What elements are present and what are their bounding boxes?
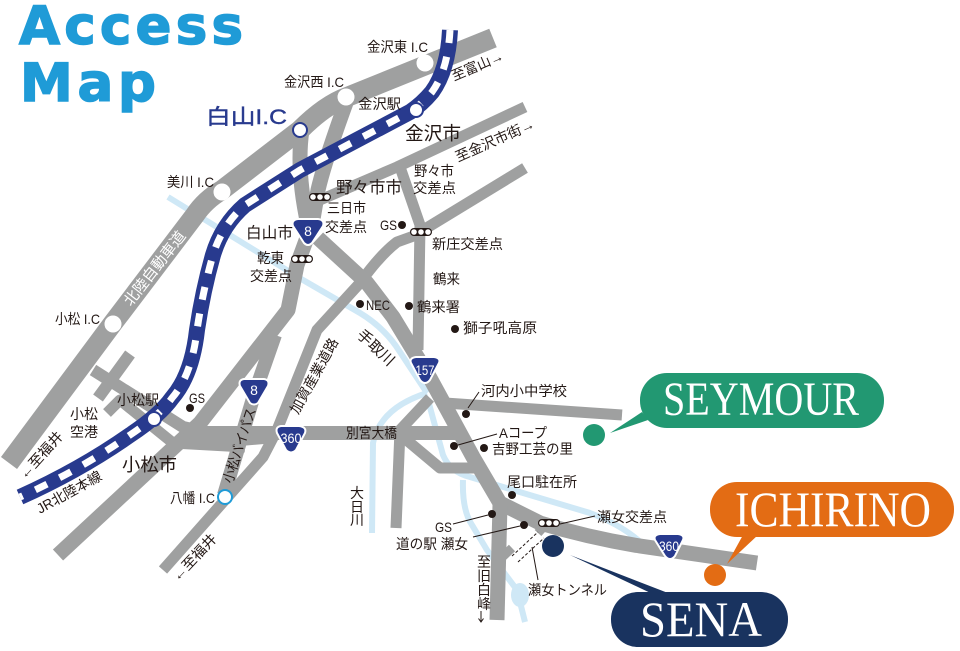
rivers <box>168 197 651 622</box>
labels: places: 野々市 <box>414 163 454 179</box>
labels: places: 小松 I.C <box>55 311 100 327</box>
labels: places: 金沢市 <box>405 123 461 144</box>
labels: vertical and rotated: 加賀産業道路 <box>287 335 341 416</box>
labels: places: GS <box>189 390 205 406</box>
tunnel <box>512 532 544 562</box>
labels: places <box>55 39 667 598</box>
labels: places: 空港 <box>70 424 98 440</box>
labels: places: 金沢西 I.C <box>284 74 344 90</box>
labels: places: 河内小中学校 <box>481 383 567 399</box>
callout: SEYMOUR: SEYMOUR <box>663 373 859 426</box>
labels: places: 白山I.C <box>206 106 287 129</box>
labels: places: 乾東 <box>257 250 284 266</box>
labels: places: 瀬女トンネル <box>528 582 607 598</box>
labels: places: GS <box>435 519 452 535</box>
title: Map <box>20 53 156 114</box>
labels: places: 八幡 I.C <box>170 490 215 506</box>
labels: vertical and rotated: 至金沢市街→ <box>453 116 537 165</box>
labels: places: 別宮大橋 <box>346 425 397 441</box>
labels: places: 鶴来署 <box>417 299 460 315</box>
labels: places: 小松市 <box>122 455 177 475</box>
labels: vertical and rotated: 至富山→ <box>449 48 506 84</box>
labels: vertical and rotated: 峰 <box>477 596 491 612</box>
route shields <box>240 219 683 559</box>
title <box>19 0 243 114</box>
labels: vertical and rotated: ←至福井 <box>15 428 66 482</box>
point markers and leaders <box>186 221 595 580</box>
callout: ICHIRINO: ICHIRINO <box>735 481 931 537</box>
labels: vertical and rotated: JR北陸本線 <box>34 468 104 517</box>
route shields: 8 <box>304 223 312 239</box>
railway <box>20 30 450 497</box>
labels: places: 道の駅 瀬女 <box>396 536 468 552</box>
labels: vertical and rotated: 至 <box>477 554 491 570</box>
route shields: 360 <box>280 430 302 446</box>
route shields: 360 <box>659 538 679 554</box>
labels: vertical and rotated: 川 <box>350 512 364 528</box>
callout: SENA: SENA <box>640 591 762 647</box>
labels: places: 交差点 <box>325 219 367 235</box>
labels: places: 新庄交差点 <box>432 236 503 252</box>
labels: places: 小松駅 <box>117 392 159 408</box>
labels: places: GS <box>380 217 397 233</box>
labels: vertical and rotated: 白 <box>477 582 491 598</box>
callout: SEYMOUR <box>583 373 884 446</box>
labels: vertical and rotated: ←至福井 <box>168 531 220 584</box>
roads <box>9 38 757 620</box>
labels: places: 尾口駐在所 <box>507 474 577 490</box>
labels: places: 獅子吼高原 <box>463 320 537 336</box>
labels: vertical and rotated <box>15 48 537 622</box>
callout: ICHIRINO <box>704 481 954 586</box>
callout: SENA <box>542 535 788 647</box>
labels: places: 野々市市 <box>336 178 402 197</box>
labels: places: 白山市 <box>246 224 293 242</box>
route shields: 157 <box>416 362 435 378</box>
labels: places: 三日市 <box>327 200 366 216</box>
labels: vertical and rotated: 手取川 <box>353 326 398 370</box>
labels: vertical and rotated: 北陸自動車道 <box>121 228 190 309</box>
labels: places: 金沢駅 <box>358 96 401 112</box>
labels: places: Aコープ <box>499 425 547 441</box>
labels: places: 金沢東 I.C <box>367 39 428 55</box>
route shields: 8 <box>250 382 258 398</box>
labels: vertical and rotated: 日 <box>350 499 364 515</box>
labels: places: 小松 <box>70 406 98 422</box>
labels: places: 吉野工芸の里 <box>492 441 573 457</box>
labels: places: 交差点 <box>413 180 456 196</box>
labels: places: 交差点 <box>250 268 292 284</box>
labels: vertical and rotated: 大 <box>350 485 364 501</box>
traffic signals <box>291 193 560 527</box>
labels: vertical and rotated: 小松バイパス <box>220 406 259 485</box>
labels: places: 美川 I.C <box>167 174 214 190</box>
labels: places: 鶴来 <box>433 271 460 287</box>
interchanges and stations <box>106 56 432 504</box>
labels: vertical and rotated: 旧 <box>477 568 491 584</box>
labels: places: NEC <box>366 297 390 313</box>
labels: places: 瀬女交差点 <box>597 509 667 525</box>
